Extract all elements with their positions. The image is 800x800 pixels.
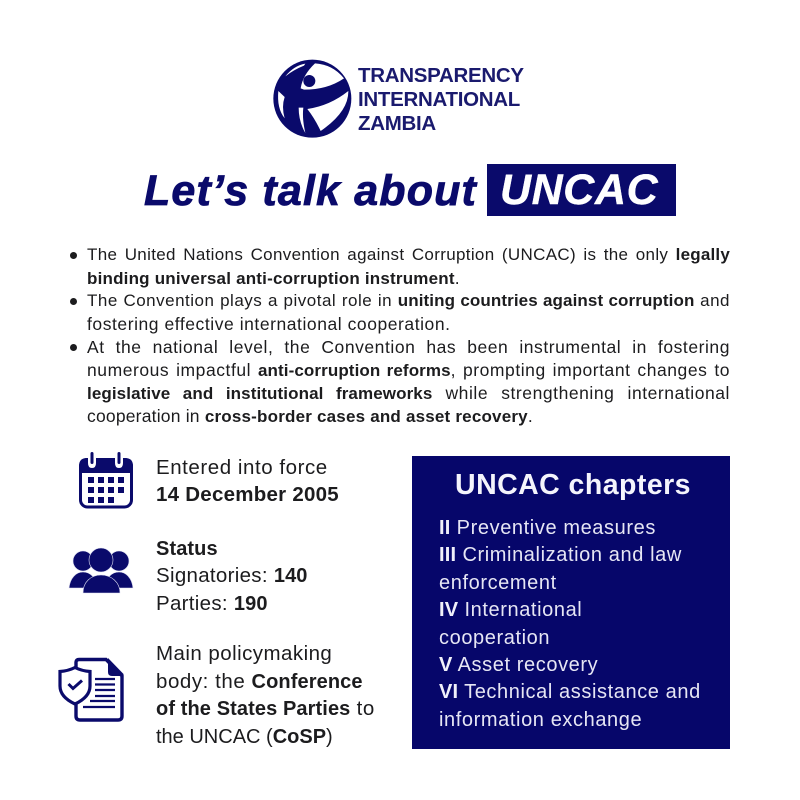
chapter list xyxy=(439,517,701,731)
bullet 1 xyxy=(70,245,730,288)
bullet 3: At the national level, the Convention has been instrumental in fostering xyxy=(87,337,730,357)
title xyxy=(144,164,676,216)
chapter list: enforcement xyxy=(439,572,557,594)
policymaking body text: of the States Parties to xyxy=(156,697,375,720)
policymaking body text: body: the Conference xyxy=(156,670,363,693)
chapter list: II Preventive measures xyxy=(439,517,656,539)
entered into force text: 14 December 2005 xyxy=(156,483,339,506)
chapter list: III Criminalization and law xyxy=(439,544,682,566)
entered into force text xyxy=(156,456,339,506)
entered into force text: Entered into force xyxy=(156,456,328,479)
bullet 1: binding universal anti-corruption instrument. xyxy=(87,268,460,288)
chapter list: cooperation xyxy=(439,627,550,649)
icon: document with shield xyxy=(58,658,124,722)
logo wordmark xyxy=(358,64,524,135)
bullet 1: The United Nations Convention against Corruption (UNCAC) is the only legally xyxy=(87,245,730,264)
chapter list: VI Technical assistance and xyxy=(439,681,701,703)
logo wordmark: ZAMBIA xyxy=(358,112,436,135)
title text: Let’s talk about xyxy=(144,167,477,215)
panel heading: UNCAC chapters xyxy=(455,469,691,501)
bullet 2: fostering effective international cooperation. xyxy=(87,314,451,334)
bullet 3 xyxy=(70,337,730,426)
logo wordmark: TRANSPARENCY xyxy=(358,64,524,87)
icon: people group xyxy=(68,548,134,594)
bullet 3: numerous impactful anti-corruption reforms, prompting important changes to xyxy=(87,360,730,380)
logo: Transparency International Zambia xyxy=(273,60,524,138)
chapter list: information exchange xyxy=(439,709,642,731)
chapter list: V Asset recovery xyxy=(439,654,598,676)
icon: calendar xyxy=(79,452,133,508)
status text: Status xyxy=(156,538,218,560)
panel: UNCAC chapters xyxy=(412,456,730,749)
logo wordmark: INTERNATIONAL xyxy=(358,88,520,111)
status text: Signatories: 140 xyxy=(156,564,308,587)
bullet 2 xyxy=(70,291,730,334)
bullet 3: cooperation in cross-border cases and asset recovery. xyxy=(87,406,533,426)
icon: globe emblem xyxy=(273,60,352,138)
policymaking body text: Main policymaking xyxy=(156,642,332,665)
policymaking body text: the UNCAC (CoSP) xyxy=(156,726,333,748)
status text xyxy=(156,538,308,615)
title highlight: UNCAC: UNCAC xyxy=(500,166,658,214)
status text: Parties: 190 xyxy=(156,592,268,615)
chapter list: IV International xyxy=(439,599,582,621)
bullet 2: The Convention plays a pivotal role in uniting countries against corruption and xyxy=(87,291,730,310)
policymaking body text xyxy=(156,642,375,748)
bullet 3: legislative and institutional frameworks while strengthening international xyxy=(87,383,730,403)
